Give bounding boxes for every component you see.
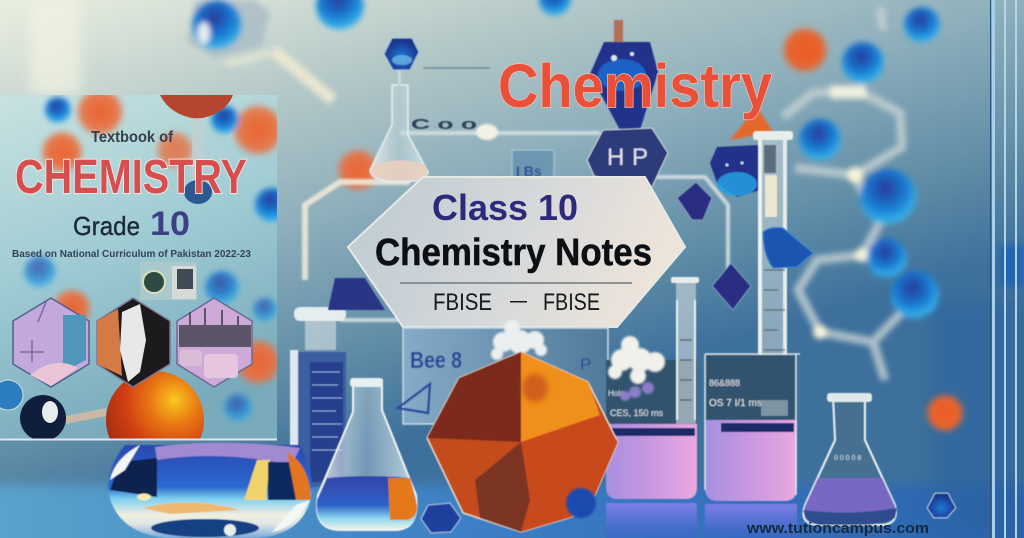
small glass balls: [0, 380, 23, 410]
right conical flask: 0 0 0 0 8: [834, 455, 861, 462]
lab pipes: [305, 133, 728, 320]
lavender beaker, right: [705, 354, 800, 538]
white crystal flake, top: [491, 320, 547, 360]
right blue vessel: [710, 145, 760, 197]
lavender beaker, left: CES, 150 ms: [610, 408, 664, 418]
cylinder foot over right beaker: [761, 400, 788, 416]
right conical flask: [803, 393, 897, 525]
round-bottom bowl flask: [108, 443, 312, 538]
small blue gem on floor, right: [927, 493, 956, 518]
banner subtext: dash: [510, 301, 527, 302]
banner subtext: FBISE left: FBISE: [433, 289, 492, 316]
blurred molecule, right side: [336, 7, 965, 433]
blue gem, top left of title: [384, 38, 419, 70]
top hexagonal vessel: [590, 20, 658, 130]
whiteboard with formula marks: Bee 8: [410, 347, 462, 373]
banner heading: Class 10: Class 10: [432, 187, 578, 228]
blue ball, right of crystal: [566, 488, 596, 518]
label: formula scribble: C o o: [411, 116, 477, 133]
orange tube, behind title right: [730, 107, 773, 140]
dark blue vessel, behind banner left: [328, 278, 385, 310]
flask, top centre: [370, 68, 428, 182]
tall measuring cylinder, right: [753, 131, 793, 415]
cover line: Grade: Grade: [73, 211, 140, 241]
whiteboard with formula marks: P: [580, 355, 591, 374]
right edge vertical lines: [990, 0, 1024, 538]
lavender beaker, left: [606, 360, 697, 538]
HP hexagon: [587, 128, 668, 190]
label: formula scribble: [411, 68, 490, 133]
textbook cover panel: [0, 95, 277, 440]
cover number: 10: 10: [150, 205, 190, 243]
main title: Chemistry: Chemistry: [498, 52, 772, 120]
small label box behind banner: I Bs: [516, 163, 542, 179]
cover artwork: [0, 95, 277, 438]
cover line: Textbook of: Textbook of: [91, 129, 174, 146]
blurred hexagon with blue atom, top left: [187, 0, 571, 100]
short cylinder: [671, 277, 699, 424]
cover subtitle: Based on National Curriculum of Pakistan 2022-23: [12, 249, 251, 260]
blue diamond crystals: [677, 182, 813, 310]
banner subtext: FBISE right: FBISE: [543, 289, 600, 316]
banner: [348, 177, 685, 327]
banner heading: Chemistry Notes: Chemistry Notes: [375, 232, 652, 274]
lavender beaker, left: Hole: [608, 389, 625, 398]
cover hexagon: factory: [177, 298, 252, 387]
lavender beaker, right: 86&888: [709, 378, 740, 388]
small label box behind banner: [512, 150, 554, 180]
cover title: CHEMISTRY: CHEMISTRY: [15, 151, 247, 204]
wine-glass flask on cover: [160, 95, 233, 204]
left cylinder with scale: [290, 307, 346, 487]
large orange ball: [106, 371, 204, 438]
white crystal flake, right: [608, 336, 665, 401]
cover hexagon: crystals: [97, 298, 170, 387]
whiteboard with formula marks: [398, 328, 608, 424]
left conical flask: [317, 378, 417, 530]
lavender beaker, right: OS 7 I/1 ms: [709, 398, 762, 409]
website watermark: www.tutioncampus.com: [746, 520, 929, 537]
cover hexagon: glassware: [13, 298, 89, 387]
white bead on pipe: [476, 124, 498, 140]
red orange polygon crystal: [427, 352, 618, 532]
cover logo and QR: [140, 262, 197, 300]
HP hexagon: H P: [607, 144, 648, 171]
blue gem on floor, left: [421, 503, 461, 533]
